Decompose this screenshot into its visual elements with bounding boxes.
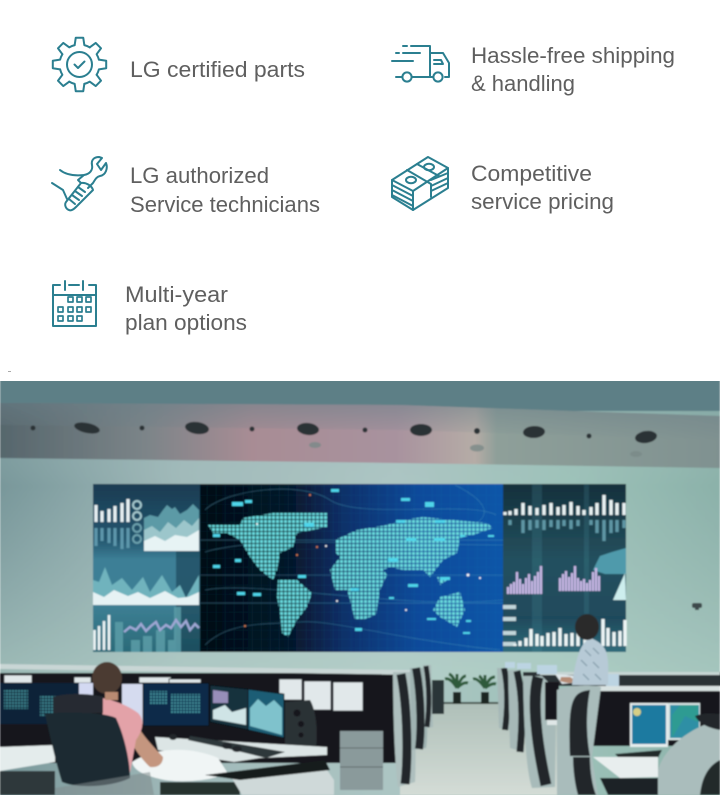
rear white monitors [4, 675, 363, 711]
label: Hassle-free shipping and handling: Hassle-free shipping [471, 43, 675, 68]
desk back band [0, 673, 400, 763]
feature: Multi-year plan options [53, 281, 247, 335]
label: LG certified parts: LG certified parts [130, 57, 305, 82]
continents [208, 513, 493, 637]
drawers and console base [340, 731, 383, 790]
label: LG authorized Service technicians: Service technicians [130, 192, 320, 217]
LED video wall [93, 484, 626, 652]
label: LG authorized Service technicians [130, 163, 320, 217]
feature: Hassle-free shipping [392, 43, 675, 96]
area: upper right teal [593, 548, 626, 574]
head [92, 662, 122, 694]
keyboard [615, 750, 662, 759]
left console row [0, 664, 444, 795]
feature: LG authorized service technicians [52, 157, 320, 217]
gauges [133, 501, 141, 543]
orbit lines [200, 485, 503, 650]
desk surfaces [0, 745, 55, 771]
label: Competitive service pricing [471, 161, 614, 214]
icon: hand holding wrench [52, 157, 107, 210]
wall [0, 370, 720, 795]
monitors with map and charts [0, 683, 284, 738]
small monitors [630, 703, 668, 747]
screen panel: right analytics [503, 484, 626, 652]
label: Hassle-free shipping and handling: & handling [471, 71, 575, 96]
bar chart: lilac right [560, 566, 599, 591]
label: Competitive service pricing: service pricing [471, 189, 614, 214]
operator seated in pink shirt [92, 662, 163, 773]
bar chart: lilac left [508, 566, 541, 594]
label: Multi-year plan options: Multi-year [125, 282, 228, 307]
vertical glow bands [532, 484, 589, 652]
bright nodes [256, 523, 481, 611]
bar chart: bottom [515, 619, 625, 646]
front right console [557, 686, 720, 795]
keyboards [188, 736, 285, 758]
label: Multi-year plan options [125, 282, 247, 335]
floor [400, 703, 570, 795]
ceiling soffit with lights [0, 381, 720, 468]
area chart: middle [93, 567, 199, 605]
icon: gear with check mark [53, 38, 106, 91]
label: Competitive service pricing: Competitive [471, 161, 592, 186]
data tags [213, 489, 494, 634]
potted plants [445, 674, 496, 704]
security camera [692, 603, 702, 610]
axis numbers [503, 605, 516, 646]
screen panel: world map [200, 484, 503, 652]
icon: calendar [53, 281, 96, 326]
screen panel: left analytics [93, 484, 200, 652]
desk top [593, 757, 658, 778]
operator standing with patterned shirt [555, 614, 608, 685]
label: Multi-year plan options: plan options [125, 310, 247, 335]
bar chart: top left [96, 499, 128, 522]
label: LG authorized Service technicians: LG authorized [130, 163, 269, 188]
office chair [45, 694, 154, 795]
area chart: top right [144, 504, 199, 551]
bar chart: top [505, 495, 624, 515]
shirt [102, 698, 142, 773]
console end panels [393, 672, 416, 787]
foreground chair [658, 720, 720, 795]
papers and rear screens [505, 662, 619, 686]
bar chart: bottom left [94, 615, 109, 650]
photo: control room [0, 370, 720, 795]
equipment cabinet [285, 700, 317, 750]
icon: delivery truck [392, 46, 449, 82]
line chart squiggle [124, 620, 199, 632]
feature: Competitive service pricing [392, 157, 614, 214]
icon: stack of banknotes [392, 157, 448, 210]
right console rows [497, 662, 720, 788]
feature: LG certified parts [53, 38, 305, 91]
label: Hassle-free shipping and handling [471, 43, 675, 96]
arm [134, 730, 164, 768]
